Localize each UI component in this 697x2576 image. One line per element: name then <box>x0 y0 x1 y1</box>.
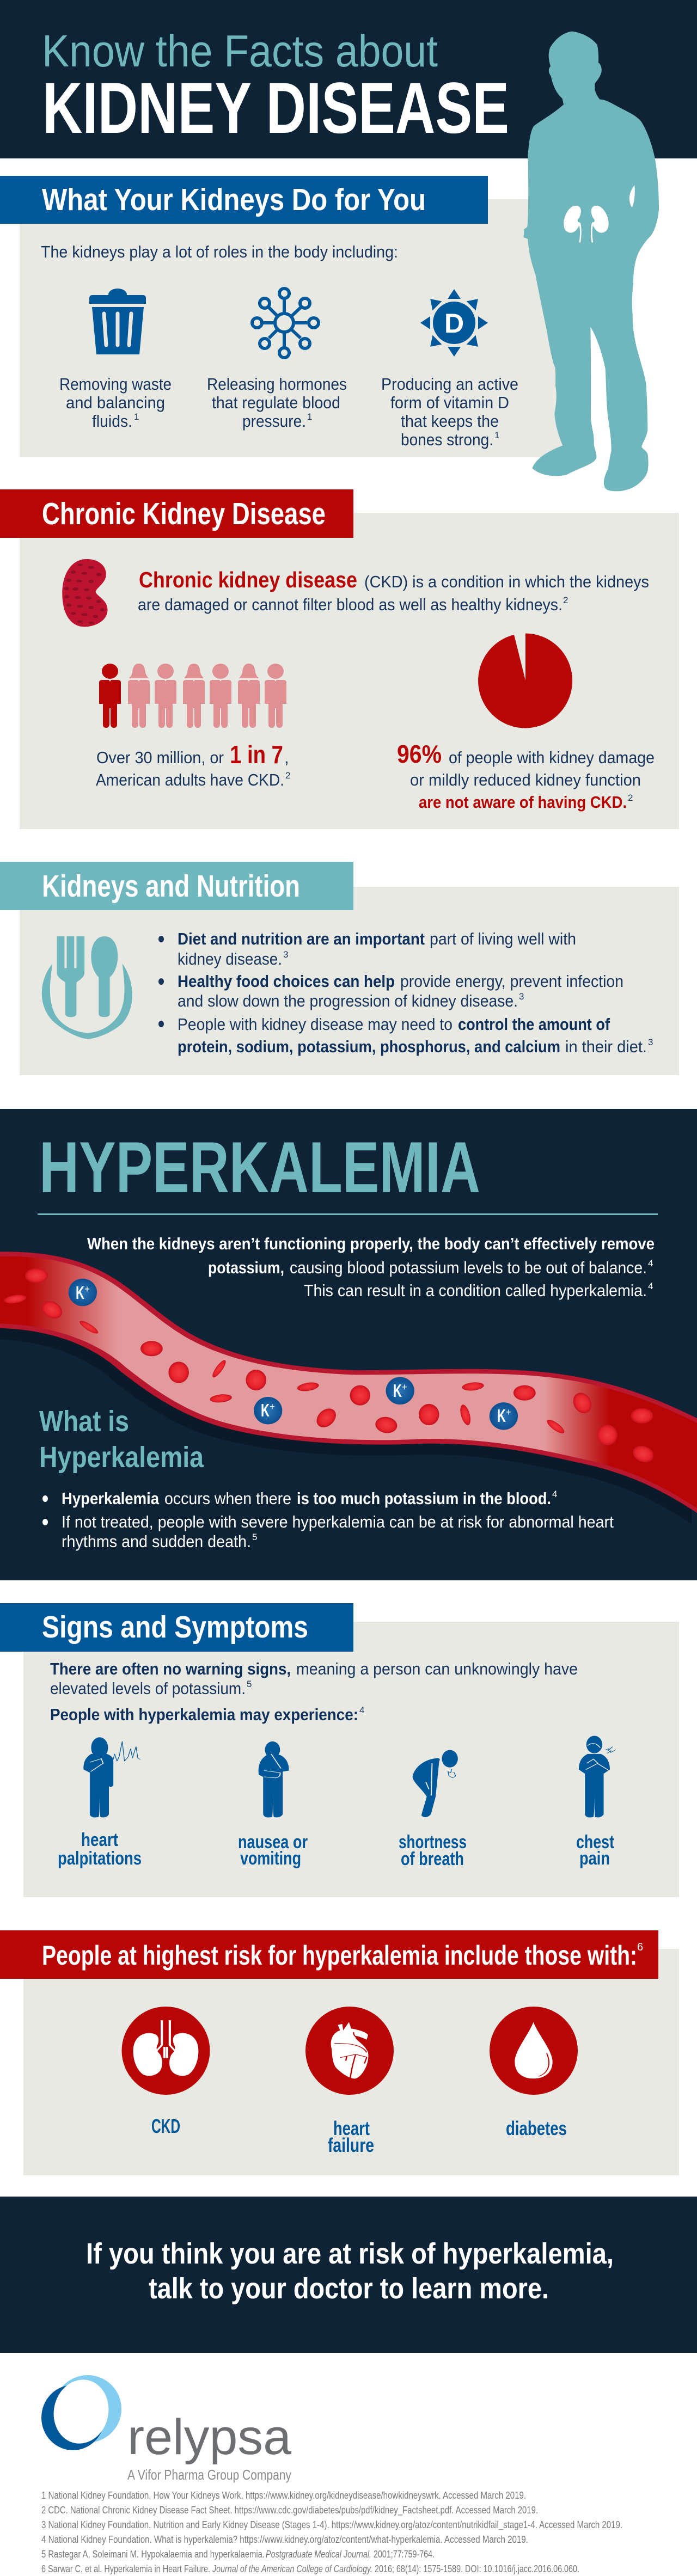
text: call to action: If you think you are at risk of hyperkalemia, <box>86 2237 614 2270</box>
text: warning signs: People with hyperkalemia may experience: <box>50 1705 358 1724</box>
text: CKD definition: are damaged or cannot filter blood as well as healthy kidneys. <box>138 595 563 614</box>
text: 1 in 7: 1 in 7 <box>230 740 283 769</box>
text: call to action <box>86 2237 614 2305</box>
chart: 96 percent pie <box>478 634 572 728</box>
labels: potassium ions: + <box>84 1284 90 1295</box>
figure: person silhouette with kidneys <box>524 32 659 491</box>
caption: releasing hormones: 1 <box>307 412 312 422</box>
text: CKD definition: (CKD) is a condition in which the kidneys <box>364 572 649 591</box>
label: diabetes: diabetes <box>506 2117 567 2139</box>
text: nutrition bullets: Healthy food choices can help <box>178 972 395 991</box>
caption: vitamin D: Producing an active <box>381 375 518 394</box>
text: hyperkalemia intro: 4 <box>648 1281 653 1291</box>
label: heart palpitations: heart <box>81 1830 118 1850</box>
text: nutrition bullets: part of living well with <box>430 929 576 948</box>
heading: what is hyperkalemia: Hyperkalemia <box>39 1441 204 1474</box>
text: hyperkalemia intro: potassium, <box>208 1258 284 1277</box>
text: 96 percent: 2 <box>628 793 633 803</box>
panel: hyperkalemia background <box>0 1109 697 1580</box>
text: warning signs: elevated levels of potassium. <box>50 1679 246 1698</box>
icon: plate fork spoon <box>42 936 132 1039</box>
text: 96 percent: or mildly reduced kidney function <box>410 770 641 789</box>
labels: potassium ions: + <box>402 1382 407 1393</box>
illustration: blood vessel with cells and potassium <box>0 1252 697 1524</box>
label: nausea or vomiting: vomiting <box>240 1848 301 1869</box>
heading: signs and symptoms: Signs and Symptoms <box>42 1610 308 1645</box>
label: shortness of breath: shortness <box>399 1832 467 1853</box>
text: warning signs: 4 <box>359 1705 364 1715</box>
text: hyperkalemia bullets: 5 <box>252 1532 257 1542</box>
panel: chronic kidney disease <box>20 513 679 829</box>
icon: blood drop circle <box>490 2007 578 2095</box>
text: 96 percent <box>397 740 655 812</box>
caption: vitamin D: 1 <box>494 430 499 440</box>
text: 1 in 7 <box>96 740 290 789</box>
caption: removing waste: fluids. <box>92 412 132 431</box>
text: nutrition bullets <box>158 929 653 1056</box>
label: shortness of breath: of breath <box>401 1849 464 1869</box>
icon: shortness of breath person <box>413 1750 458 1817</box>
icon: trash can <box>89 289 146 354</box>
label: chest pain: pain <box>579 1848 610 1869</box>
references: 2001;77:759-764. <box>374 2549 435 2560</box>
caption: vitamin D: that keeps the <box>401 412 499 431</box>
caption: removing waste: and balancing <box>66 393 165 412</box>
call to action band <box>0 2197 697 2353</box>
labels: potassium ions: K <box>261 1400 270 1420</box>
label: heart palpitations: palpitations <box>58 1848 142 1869</box>
text: nutrition bullets: 3 <box>283 949 288 960</box>
text: 1 in 7: , <box>284 748 289 767</box>
labels: potassium ions: K <box>393 1381 402 1401</box>
label: shortness of breath <box>399 1832 467 1869</box>
logo: relypsa: A Vifor Pharma Group Company <box>127 2467 291 2483</box>
text: warning signs: meaning a person can unknowingly have <box>296 1659 578 1678</box>
caption: vitamin D: bones strong. <box>401 430 493 449</box>
text: nutrition bullets: in their diet. <box>565 1037 647 1056</box>
text: nutrition bullets: 3 <box>648 1037 653 1047</box>
text: CKD definition: Chronic kidney disease <box>139 567 357 592</box>
references: 4 National Kidney Foundation. What is hyperkalemia? https://www.kidney.org/atoz/content/what-hyperkalemia. Accessed March 2019. <box>41 2534 528 2545</box>
text: nutrition bullets: provide energy, prevent infection <box>400 972 623 991</box>
text: hyperkalemia bullets: If not treated, people with severe hyperkalemia can be at risk for abnormal heart <box>62 1512 614 1531</box>
caption: releasing hormones: Releasing hormones <box>207 375 347 394</box>
caption: releasing hormones: that regulate blood <box>212 393 340 412</box>
caption: removing waste: Removing waste <box>59 375 172 394</box>
references: 6 Sarwar C, et al. Hyperkalemia in Heart Failure. <box>41 2563 210 2574</box>
text: hyperkalemia intro: This can result in a condition called hyperkalemia. <box>304 1281 647 1300</box>
heading: what your kidneys do: What Your Kidneys Do for You <box>42 182 426 217</box>
label: heart failure: failure <box>328 2134 374 2156</box>
text: nutrition bullets: control the amount of <box>458 1015 610 1034</box>
caption: vitamin D: form of vitamin D <box>390 393 509 412</box>
icon: heart palpitations person <box>83 1737 140 1817</box>
label: nausea or vomiting <box>238 1832 308 1869</box>
text: nutrition bullets: protein, sodium, potassium, phosphorus, and calcium <box>178 1037 560 1056</box>
heading: chronic kidney disease <box>0 489 353 538</box>
text: hyperkalemia bullets: 4 <box>552 1489 557 1499</box>
heading: chronic kidney disease: Chronic Kidney Disease <box>42 496 326 531</box>
text: nutrition bullets: Diet and nutrition are an important <box>178 929 425 948</box>
text: nutrition bullets: and slow down the progression of kidney disease. <box>178 991 518 1010</box>
references: Journal of the American College of Cardiology. <box>212 2563 372 2574</box>
text: hyperkalemia bullets <box>42 1489 614 1551</box>
heading: what is hyperkalemia: What is <box>39 1405 129 1438</box>
text: 1 in 7: American adults have CKD. <box>96 770 284 789</box>
intro text: The kidneys play a lot of roles in the body including: <box>41 242 398 261</box>
caption: removing waste: 1 <box>134 412 139 422</box>
icon: vitamin D sun <box>420 289 488 357</box>
heading: people at highest risk <box>0 1930 658 1979</box>
heading: kidneys and nutrition <box>0 862 353 910</box>
panel: risk factors <box>23 1949 679 2175</box>
text: hyperkalemia intro <box>87 1234 655 1300</box>
label: chest pain <box>576 1832 614 1869</box>
title: Know the Facts about <box>42 26 438 76</box>
text: hyperkalemia bullets: rhythms and sudden death. <box>62 1532 251 1551</box>
label: heart failure <box>328 2117 374 2156</box>
references: 1 National Kidney Foundation. How Your Kidneys Work. https://www.kidney.org/kidneydisease/howkidneyswrk. Accessed March 2019. <box>41 2490 526 2501</box>
references <box>41 2490 622 2574</box>
label: nausea or vomiting: nausea or <box>238 1832 308 1853</box>
heading: what your kidneys do <box>0 176 488 224</box>
caption: vitamin D <box>381 375 518 449</box>
text: nutrition bullets: People with kidney disease may need to <box>178 1015 453 1034</box>
icon: CKD kidneys circle <box>122 2007 210 2095</box>
labels: potassium ions: + <box>506 1407 511 1418</box>
label: heart palpitations <box>58 1830 142 1869</box>
text: 1 in 7: 2 <box>285 770 290 781</box>
label: chest pain: chest <box>576 1832 614 1853</box>
caption: releasing hormones <box>207 375 347 431</box>
icon: chest pain person <box>579 1736 616 1817</box>
heading: what is hyperkalemia <box>39 1405 204 1474</box>
text: nutrition bullets: kidney disease. <box>178 949 282 968</box>
title <box>42 26 509 149</box>
heading: signs and symptoms <box>0 1603 353 1652</box>
text: 1 in 7: Over 30 million, or <box>96 748 224 767</box>
text: 96 percent: of people with kidney damage <box>449 748 655 767</box>
text: call to action: talk to your doctor to learn more. <box>149 2272 549 2305</box>
panel: what your kidneys do <box>20 199 566 457</box>
references: 2016; 68(14): 1575-1589. DOI: 10.1016/j.jacc.2016.06.060. <box>375 2563 579 2574</box>
labels: potassium ions: K <box>76 1283 84 1303</box>
label: CKD: CKD <box>151 2115 180 2137</box>
text: hyperkalemia bullets: Hyperkalemia <box>62 1489 160 1508</box>
title: KIDNEY DISEASE <box>42 68 509 149</box>
text: 96 percent: 96% <box>397 740 442 768</box>
icon: hormones network <box>252 289 319 358</box>
labels: potassium ions: + <box>270 1401 275 1412</box>
icon: damaged kidney <box>62 559 108 627</box>
text: 96 percent: are not aware of having CKD. <box>419 793 627 812</box>
labels: potassium ions: K <box>497 1406 506 1426</box>
text: CKD definition <box>138 567 649 614</box>
logo: relypsa: relypsa <box>127 2409 292 2465</box>
text: warning signs: There are often no warning signs, <box>50 1659 291 1678</box>
text: hyperkalemia bullets: is too much potassium in the blood. <box>297 1489 551 1508</box>
text: warning signs: 5 <box>247 1679 252 1689</box>
text: hyperkalemia intro: causing blood potassium levels to be out of balance. <box>290 1258 647 1277</box>
heading: people at highest risk: 6 <box>637 1941 643 1953</box>
text: hyperkalemia bullets: occurs when there <box>164 1489 291 1508</box>
references: 2 CDC. National Chronic Kidney Disease Fact Sheet. https://www.cdc.gov/diabetes/pubs/pdf/kidney_Factsheet.pdf. Accessed March 2019. <box>41 2505 538 2516</box>
panel: signs and symptoms <box>23 1622 679 1897</box>
text: warning signs <box>50 1659 578 1724</box>
label: heart failure: heart <box>333 2117 370 2139</box>
text: nutrition bullets: 3 <box>519 991 524 1002</box>
icon: vitamin D sun: D <box>444 308 464 339</box>
pictogram: 1 in 7 people <box>99 664 286 728</box>
header band <box>0 0 697 158</box>
panel: kidneys and nutrition <box>20 887 679 1075</box>
text: hyperkalemia intro: 4 <box>648 1258 653 1268</box>
references: Postgraduate Medical Journal. <box>266 2549 371 2560</box>
icon: heart circle <box>305 2007 394 2095</box>
labels: potassium ions <box>76 1283 511 1426</box>
caption: removing waste <box>59 375 172 431</box>
text: CKD definition: 2 <box>563 595 568 605</box>
heading: hyperkalemia: HYPERKALEMIA <box>39 1127 480 1208</box>
logo: relypsa <box>41 2375 292 2483</box>
references: 5 Rastegar A, Soleimani M. Hypokalaemia and hyperkalaemia. <box>41 2549 265 2560</box>
caption: releasing hormones: pressure. <box>242 412 306 431</box>
heading: kidneys and nutrition: Kidneys and Nutrition <box>42 869 300 904</box>
icon: nausea person <box>259 1741 289 1817</box>
